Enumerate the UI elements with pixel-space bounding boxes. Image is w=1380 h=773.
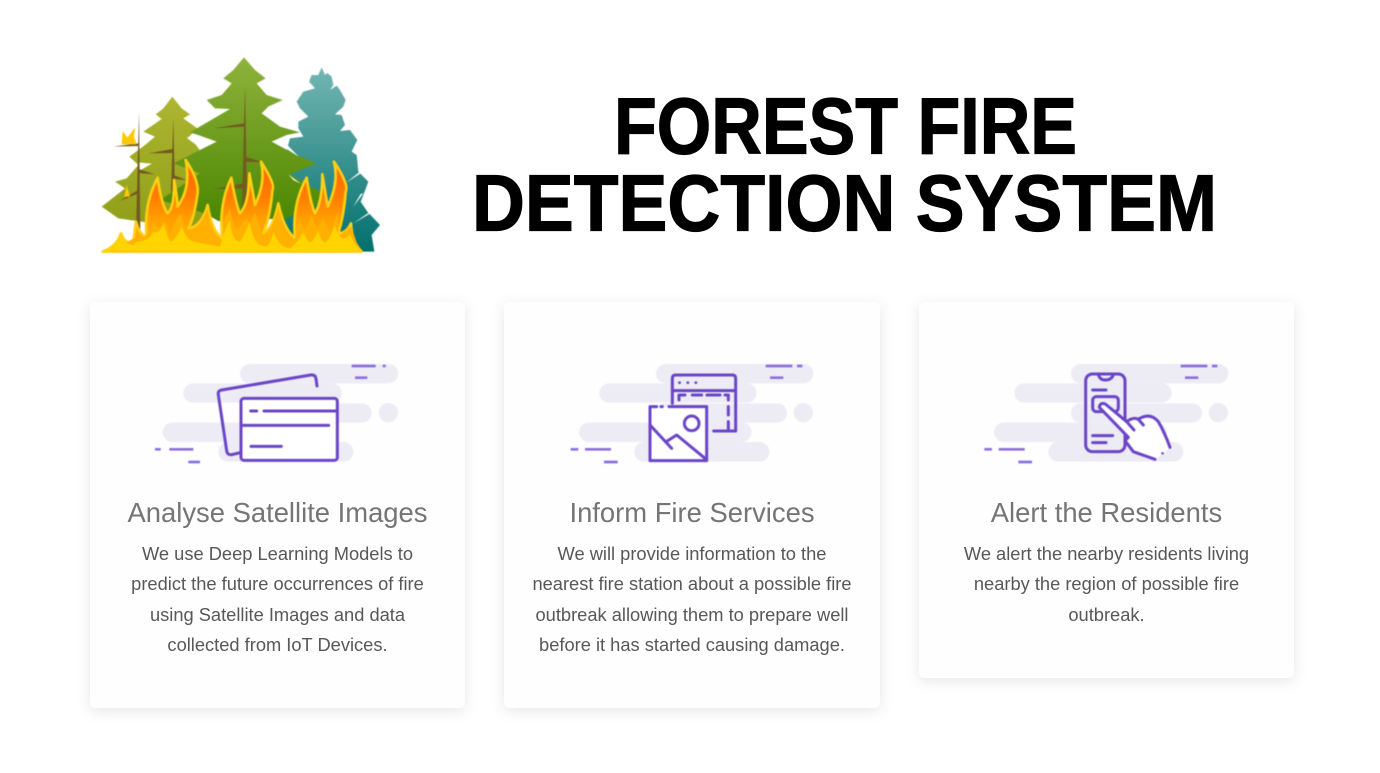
body text: collected from IoT Devices. <box>167 634 388 655</box>
body text: nearby the region of possible fire <box>974 573 1239 594</box>
heading: Alert the Residents <box>991 497 1222 528</box>
teal tree highlights <box>347 171 373 223</box>
body text: outbreak. <box>1068 604 1145 625</box>
body text: predict the future occurrences of fire <box>131 573 424 594</box>
title: FOREST FIRE <box>614 82 1077 170</box>
body text: outbreak allowing them to prepare well <box>536 604 848 625</box>
body text: We use Deep Learning Models to <box>142 543 413 564</box>
title <box>472 82 1217 248</box>
teal tree <box>283 67 380 252</box>
heading: Inform Fire Services <box>569 497 815 528</box>
icon: cards on clouds <box>154 364 398 464</box>
main flames <box>103 160 362 252</box>
small olive tree <box>102 97 207 228</box>
right white gaps <box>272 141 301 184</box>
forest fire illustration <box>100 57 380 254</box>
white gaps between trees <box>138 137 217 170</box>
icon: window and picture <box>570 364 814 464</box>
flame base <box>110 207 360 252</box>
body text: using Satellite Images and data <box>150 604 405 625</box>
body text: We will provide information to the <box>558 543 826 564</box>
body text <box>964 543 1249 625</box>
flame base highlight <box>103 220 361 252</box>
body text: We alert the nearby residents living <box>964 543 1249 564</box>
heading: Analyse Satellite Images <box>128 497 427 528</box>
small flames on burnt tree <box>122 128 137 197</box>
body text: before it has started causing damage. <box>539 634 845 655</box>
icon: phone with tapping hand <box>984 364 1228 464</box>
body text <box>131 543 424 655</box>
tree trunks <box>113 86 263 232</box>
body text <box>532 543 852 655</box>
body text: nearest fire station about a possible fire <box>532 573 852 594</box>
panel: inform fire services <box>504 302 880 708</box>
panel: analyse satellite images <box>90 302 465 708</box>
panel: alert the residents <box>919 302 1294 678</box>
big green tree <box>160 57 323 221</box>
